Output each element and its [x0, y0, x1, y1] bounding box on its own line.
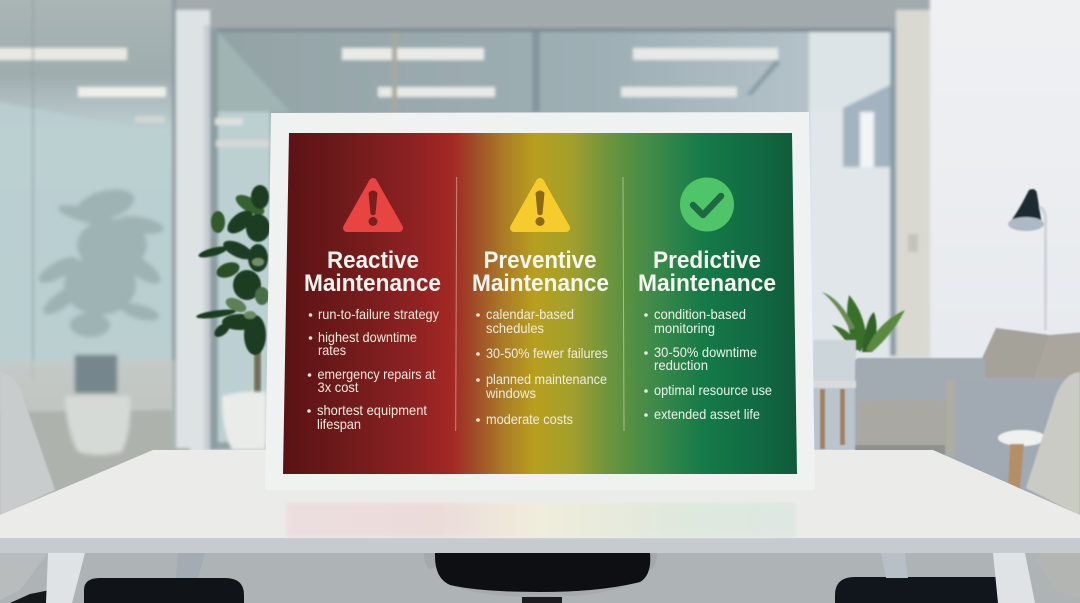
small plant [822, 292, 905, 352]
poster board [265, 112, 815, 490]
divider: preventive and predictive [623, 177, 624, 431]
plant reflection in glass [35, 184, 165, 455]
list: predictive points: optimal resource use [654, 383, 772, 398]
list: predictive points: monitoring [654, 321, 715, 336]
list: preventive points: planned maintenance [486, 372, 607, 387]
list: reactive points: 3x cost [318, 380, 359, 395]
list: preventive points: schedules [486, 321, 544, 336]
list: preventive points: 30-50% fewer failures [486, 346, 608, 361]
panel: predictive maintenance [638, 178, 776, 422]
table legs and chair parts [0, 553, 1080, 603]
panel: preventive maintenance [472, 182, 609, 427]
list: reactive points [307, 307, 439, 432]
heading: predictive maintenance [638, 247, 776, 297]
list: predictive points: 30-50% downtime [654, 345, 757, 360]
list: predictive points [644, 307, 772, 422]
poster gradient panel [283, 133, 797, 474]
left chair back [0, 372, 55, 516]
heading: preventive maintenance: Preventive [484, 247, 596, 274]
heading: reactive maintenance: Maintenance [304, 270, 441, 297]
heading: predictive maintenance: Predictive [653, 247, 761, 274]
list: reactive points: emergency repairs at [318, 367, 436, 382]
icon: yellow warning triangle [514, 182, 566, 228]
list: reactive points: shortest equipment [317, 403, 427, 418]
list: preventive points [476, 307, 608, 427]
list: preventive points: windows [485, 386, 536, 401]
heading: preventive maintenance: Maintenance [472, 270, 609, 297]
heading: predictive maintenance: Maintenance [638, 270, 776, 297]
list: predictive points: extended asset life [654, 407, 760, 422]
heading: reactive maintenance [304, 247, 441, 297]
list: preventive points: calendar-based [486, 307, 574, 322]
divider: reactive and preventive [456, 177, 457, 431]
floor [0, 553, 1080, 603]
heading: preventive maintenance [472, 247, 609, 297]
icon: green check circle [680, 178, 734, 232]
table front edge [0, 538, 1080, 553]
panel: reactive maintenance [304, 182, 441, 432]
table top [0, 450, 1080, 538]
list: reactive points: lifespan [317, 417, 361, 432]
list: reactive points: run-to-failure strategy [318, 307, 439, 322]
list: reactive points: rates [318, 343, 346, 358]
poster reflection [286, 503, 796, 537]
lamp [1008, 189, 1047, 330]
heading: reactive maintenance: Reactive [327, 247, 419, 274]
list: predictive points: reduction [654, 358, 708, 373]
right chair back [1026, 372, 1080, 516]
list: reactive points: highest downtime [318, 330, 417, 345]
sofa [813, 328, 1080, 520]
icon: red warning triangle [347, 182, 399, 228]
list: preventive points: moderate costs [486, 412, 573, 427]
list: predictive points: condition-based [654, 307, 746, 322]
potted plant [196, 185, 270, 450]
